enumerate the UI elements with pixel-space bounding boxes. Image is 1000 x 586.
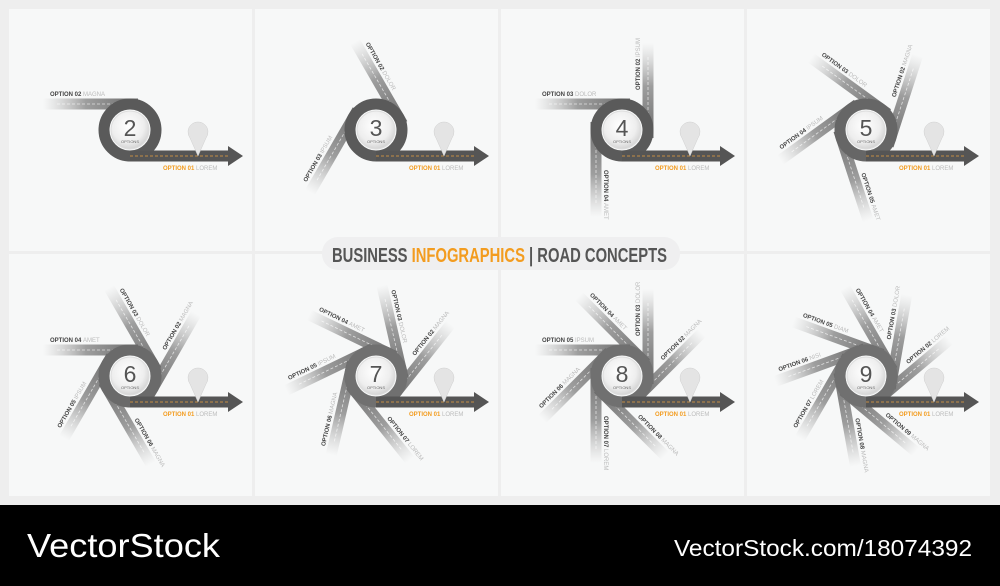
ring road	[840, 350, 892, 402]
title pill	[322, 237, 680, 270]
road: option 03: OPTION 03 DOLOR	[820, 52, 868, 89]
center circle: OPTIONS	[367, 385, 385, 390]
center circle: 8	[616, 361, 628, 387]
arrow road	[866, 392, 979, 412]
pin	[924, 368, 944, 402]
arrow road	[622, 392, 735, 412]
center circle	[603, 111, 641, 149]
road: option 02: OPTION 02 MAGNA	[412, 310, 451, 357]
arrow road	[866, 146, 979, 166]
ring road	[596, 350, 648, 402]
road: option 04: OPTION 04 AMET	[50, 338, 100, 344]
center circle: OPTIONS	[121, 139, 139, 144]
road: option 02: OPTION 02 IPSUM	[636, 38, 642, 90]
road: option 05	[54, 350, 116, 441]
center circle: 9	[860, 361, 872, 387]
label: option 01: OPTION 01 LOREM	[655, 412, 709, 418]
road: option 07	[590, 368, 608, 470]
center circle: OPTIONS	[613, 385, 631, 390]
center circle: OPTIONS	[613, 139, 631, 144]
panel: 2 options	[43, 92, 243, 172]
road: option 02	[636, 38, 654, 138]
road: option 03	[535, 92, 630, 110]
road: option 02	[350, 36, 413, 127]
pin	[924, 122, 944, 156]
road: option 04	[43, 338, 138, 356]
road: option 02	[382, 310, 460, 402]
panel: 4 options	[535, 38, 735, 220]
road: option 06	[320, 360, 358, 456]
panel: 8 options	[534, 281, 735, 470]
footer bar: VectorStock.com/18074392	[674, 535, 972, 561]
road: option 02: OPTION 02 MAGNA	[892, 44, 914, 98]
road: option 06	[534, 343, 613, 423]
center circle: 6	[124, 361, 136, 387]
arrow road	[376, 146, 489, 166]
center circle	[111, 111, 149, 149]
road: option 05	[281, 338, 374, 395]
road: option 09: OPTION 09 MAGNA	[884, 412, 930, 452]
road: option 03	[104, 282, 167, 373]
arrow road	[376, 392, 489, 412]
center circle	[357, 357, 395, 395]
road: option 05: OPTION 05 IPSUM	[542, 338, 594, 344]
road: option 02: OPTION 02 MAGNA	[162, 301, 195, 351]
center circle	[603, 357, 641, 395]
road: option 04	[773, 95, 860, 165]
road: option 08: OPTION 08 MAGNA	[853, 418, 869, 473]
center circle: 5	[860, 115, 872, 141]
road: option 02	[869, 326, 959, 405]
road: option 06: OPTION 06 MAGNA	[133, 418, 165, 468]
road: option 03: OPTION 03 DOLOR	[887, 285, 902, 340]
road: option 06: OPTION 06 MAGNA	[321, 392, 339, 447]
road: option 07	[790, 350, 852, 441]
label: option 01: OPTION 01 LOREM	[409, 166, 463, 172]
road: option 03	[377, 283, 415, 379]
road: option 03: OPTION 03 DOLOR	[636, 281, 642, 336]
road: option 03: OPTION 03 DOLOR	[118, 288, 150, 338]
center circle: OPTIONS	[857, 139, 875, 144]
road: option 02: OPTION 02 MAGNA	[50, 92, 105, 98]
pin	[434, 368, 454, 402]
ring road	[350, 104, 402, 156]
center circle: 3	[370, 115, 382, 141]
road: option 03	[808, 48, 895, 118]
road: option 04: OPTION 04 AMET	[318, 307, 365, 334]
label: option 01: OPTION 01 LOREM	[163, 412, 217, 418]
road: option 02: OPTION 02 MAGNA	[660, 319, 703, 362]
road: option 04: OPTION 04 AMET	[854, 288, 884, 334]
arrow road	[130, 392, 243, 412]
center circle: 2	[124, 115, 136, 141]
road: option 03	[636, 281, 654, 384]
panel: 3 options	[300, 36, 489, 195]
road: option 03	[878, 285, 914, 389]
road: option 06	[771, 338, 867, 386]
arrow road	[130, 146, 243, 166]
title pill: BUSINESS INFOGRAPHICS | ROAD CONCEPTS	[332, 245, 667, 267]
road: option 07: OPTION 07 LOREM	[385, 416, 424, 462]
label: option 01: OPTION 01 LOREM	[899, 412, 953, 418]
center circle	[847, 357, 885, 395]
road: option 07: OPTION 07 LOREM	[793, 379, 825, 429]
road: option 03: OPTION 03 IPSUM	[303, 135, 334, 183]
road: option 03: OPTION 03 DOLOR	[542, 92, 597, 98]
road: option 05: OPTION 05 IPSUM	[57, 381, 88, 429]
road: option 04	[575, 288, 655, 367]
road: option 04	[840, 282, 903, 373]
pin	[188, 368, 208, 402]
center circle: OPTIONS	[367, 139, 385, 144]
center circle	[357, 111, 395, 149]
road: option 09	[840, 382, 930, 461]
road: option 05	[834, 127, 881, 225]
panel: 5 options	[773, 44, 979, 225]
ring road	[104, 104, 156, 156]
road: option 03: OPTION 03 DOLOR	[389, 290, 407, 345]
road: option 06: OPTION 06 MAGNA	[539, 367, 582, 410]
arrow road	[622, 146, 735, 166]
footer bar	[0, 505, 1000, 586]
road: option 06: OPTION 06 NISI	[778, 352, 822, 373]
road: option 05	[791, 311, 887, 359]
ring road	[840, 104, 892, 156]
road: option 02	[626, 319, 711, 404]
panel: 9 options	[771, 282, 979, 475]
center circle: 7	[370, 361, 382, 387]
center circle	[847, 111, 885, 149]
center circle: OPTIONS	[857, 385, 875, 390]
road: option 07: OPTION 07 LOREM	[602, 416, 608, 470]
road: option 04: OPTION 04 AMET	[602, 170, 608, 220]
road: option 04: OPTION 04 IPSUM	[779, 116, 825, 151]
road: option 02	[43, 92, 138, 110]
road: option 08	[834, 371, 869, 475]
footer bar: VectorStock	[27, 527, 221, 564]
road: option 05	[535, 338, 630, 356]
road: option 08: OPTION 08 MAGNA	[636, 414, 679, 457]
road: option 05: OPTION 05 IPSUM	[287, 354, 337, 382]
road: option 08	[594, 380, 679, 465]
label: option 01: OPTION 01 LOREM	[409, 412, 463, 418]
panel: 7 options	[281, 283, 489, 469]
ring road	[350, 350, 402, 402]
road: option 03	[300, 104, 362, 195]
pin	[434, 122, 454, 156]
ring road	[596, 104, 648, 156]
label: option 01: OPTION 01 LOREM	[163, 166, 217, 172]
center circle: 4	[616, 115, 629, 141]
panel: 6 options	[43, 282, 243, 474]
road: option 02: OPTION 02 LOREM	[906, 326, 951, 366]
road: option 06	[99, 376, 165, 474]
road: option 02: OPTION 02 DOLOR	[364, 42, 396, 92]
road: option 02	[877, 44, 925, 147]
pin	[188, 122, 208, 156]
road: option 04	[590, 122, 608, 220]
road: option 04	[306, 304, 400, 361]
road: option 04: OPTION 04 AMET	[588, 293, 628, 332]
pin	[680, 368, 700, 402]
pin	[680, 122, 700, 156]
road: option 07	[346, 378, 424, 469]
road: option 02	[138, 301, 205, 399]
road: option 05: OPTION 05 DIAM	[802, 313, 849, 335]
center circle	[111, 357, 149, 395]
road: option 05: OPTION 05 AMET	[859, 172, 881, 222]
label: option 01: OPTION 01 LOREM	[655, 166, 709, 172]
center circle: OPTIONS	[121, 385, 139, 390]
ring road	[104, 350, 156, 402]
label: option 01: OPTION 01 LOREM	[899, 166, 953, 172]
